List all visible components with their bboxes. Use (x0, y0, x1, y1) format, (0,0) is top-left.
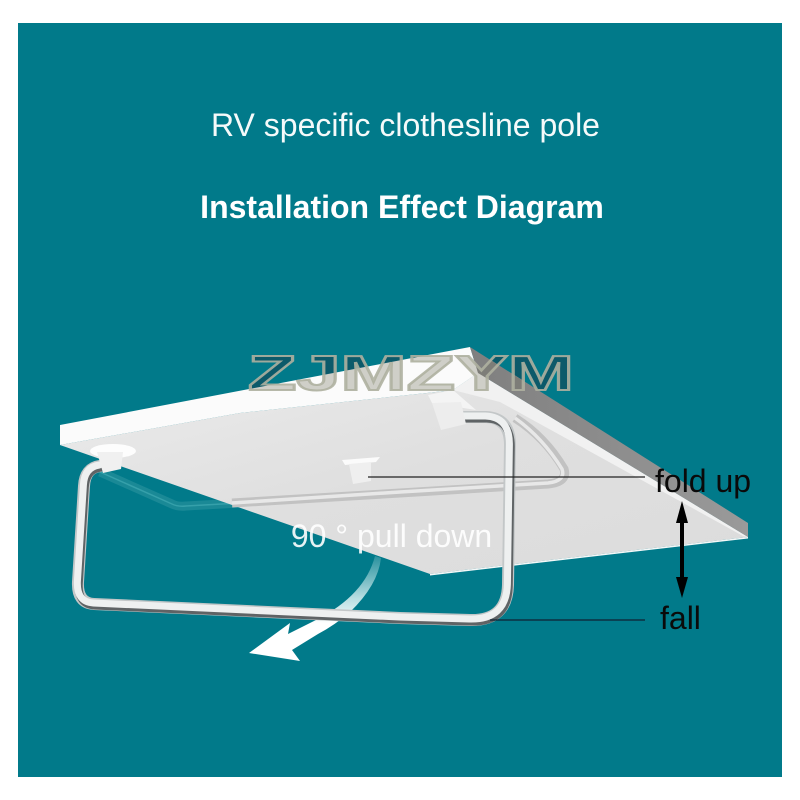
curved pull-down arrow (249, 556, 381, 661)
shelf board (60, 347, 748, 576)
label: 90 degree pull down: 90 ° pull down (291, 518, 492, 554)
leader line: fold up (368, 476, 645, 478)
label: fold up: fold up (655, 463, 751, 499)
bracket: left (90, 444, 136, 473)
leader line: fall (490, 619, 645, 621)
label: fall: fall (660, 600, 701, 636)
double-headed arrow (676, 501, 688, 598)
ghost rod: folded up, seen over teal (100, 472, 240, 506)
bracket: right (428, 390, 476, 430)
title: RV specific clothesline pole: RV specific clothesline pole (211, 107, 600, 143)
chrome rod: pulled down position (77, 416, 511, 622)
watermark: ZJMZYM: ZJMZYM (248, 347, 574, 401)
bracket: centre (342, 457, 380, 484)
heading: Installation Effect Diagram: Installation Effect Diagram (200, 189, 604, 225)
ghost rod: folded up, seen over shelf (232, 418, 565, 503)
